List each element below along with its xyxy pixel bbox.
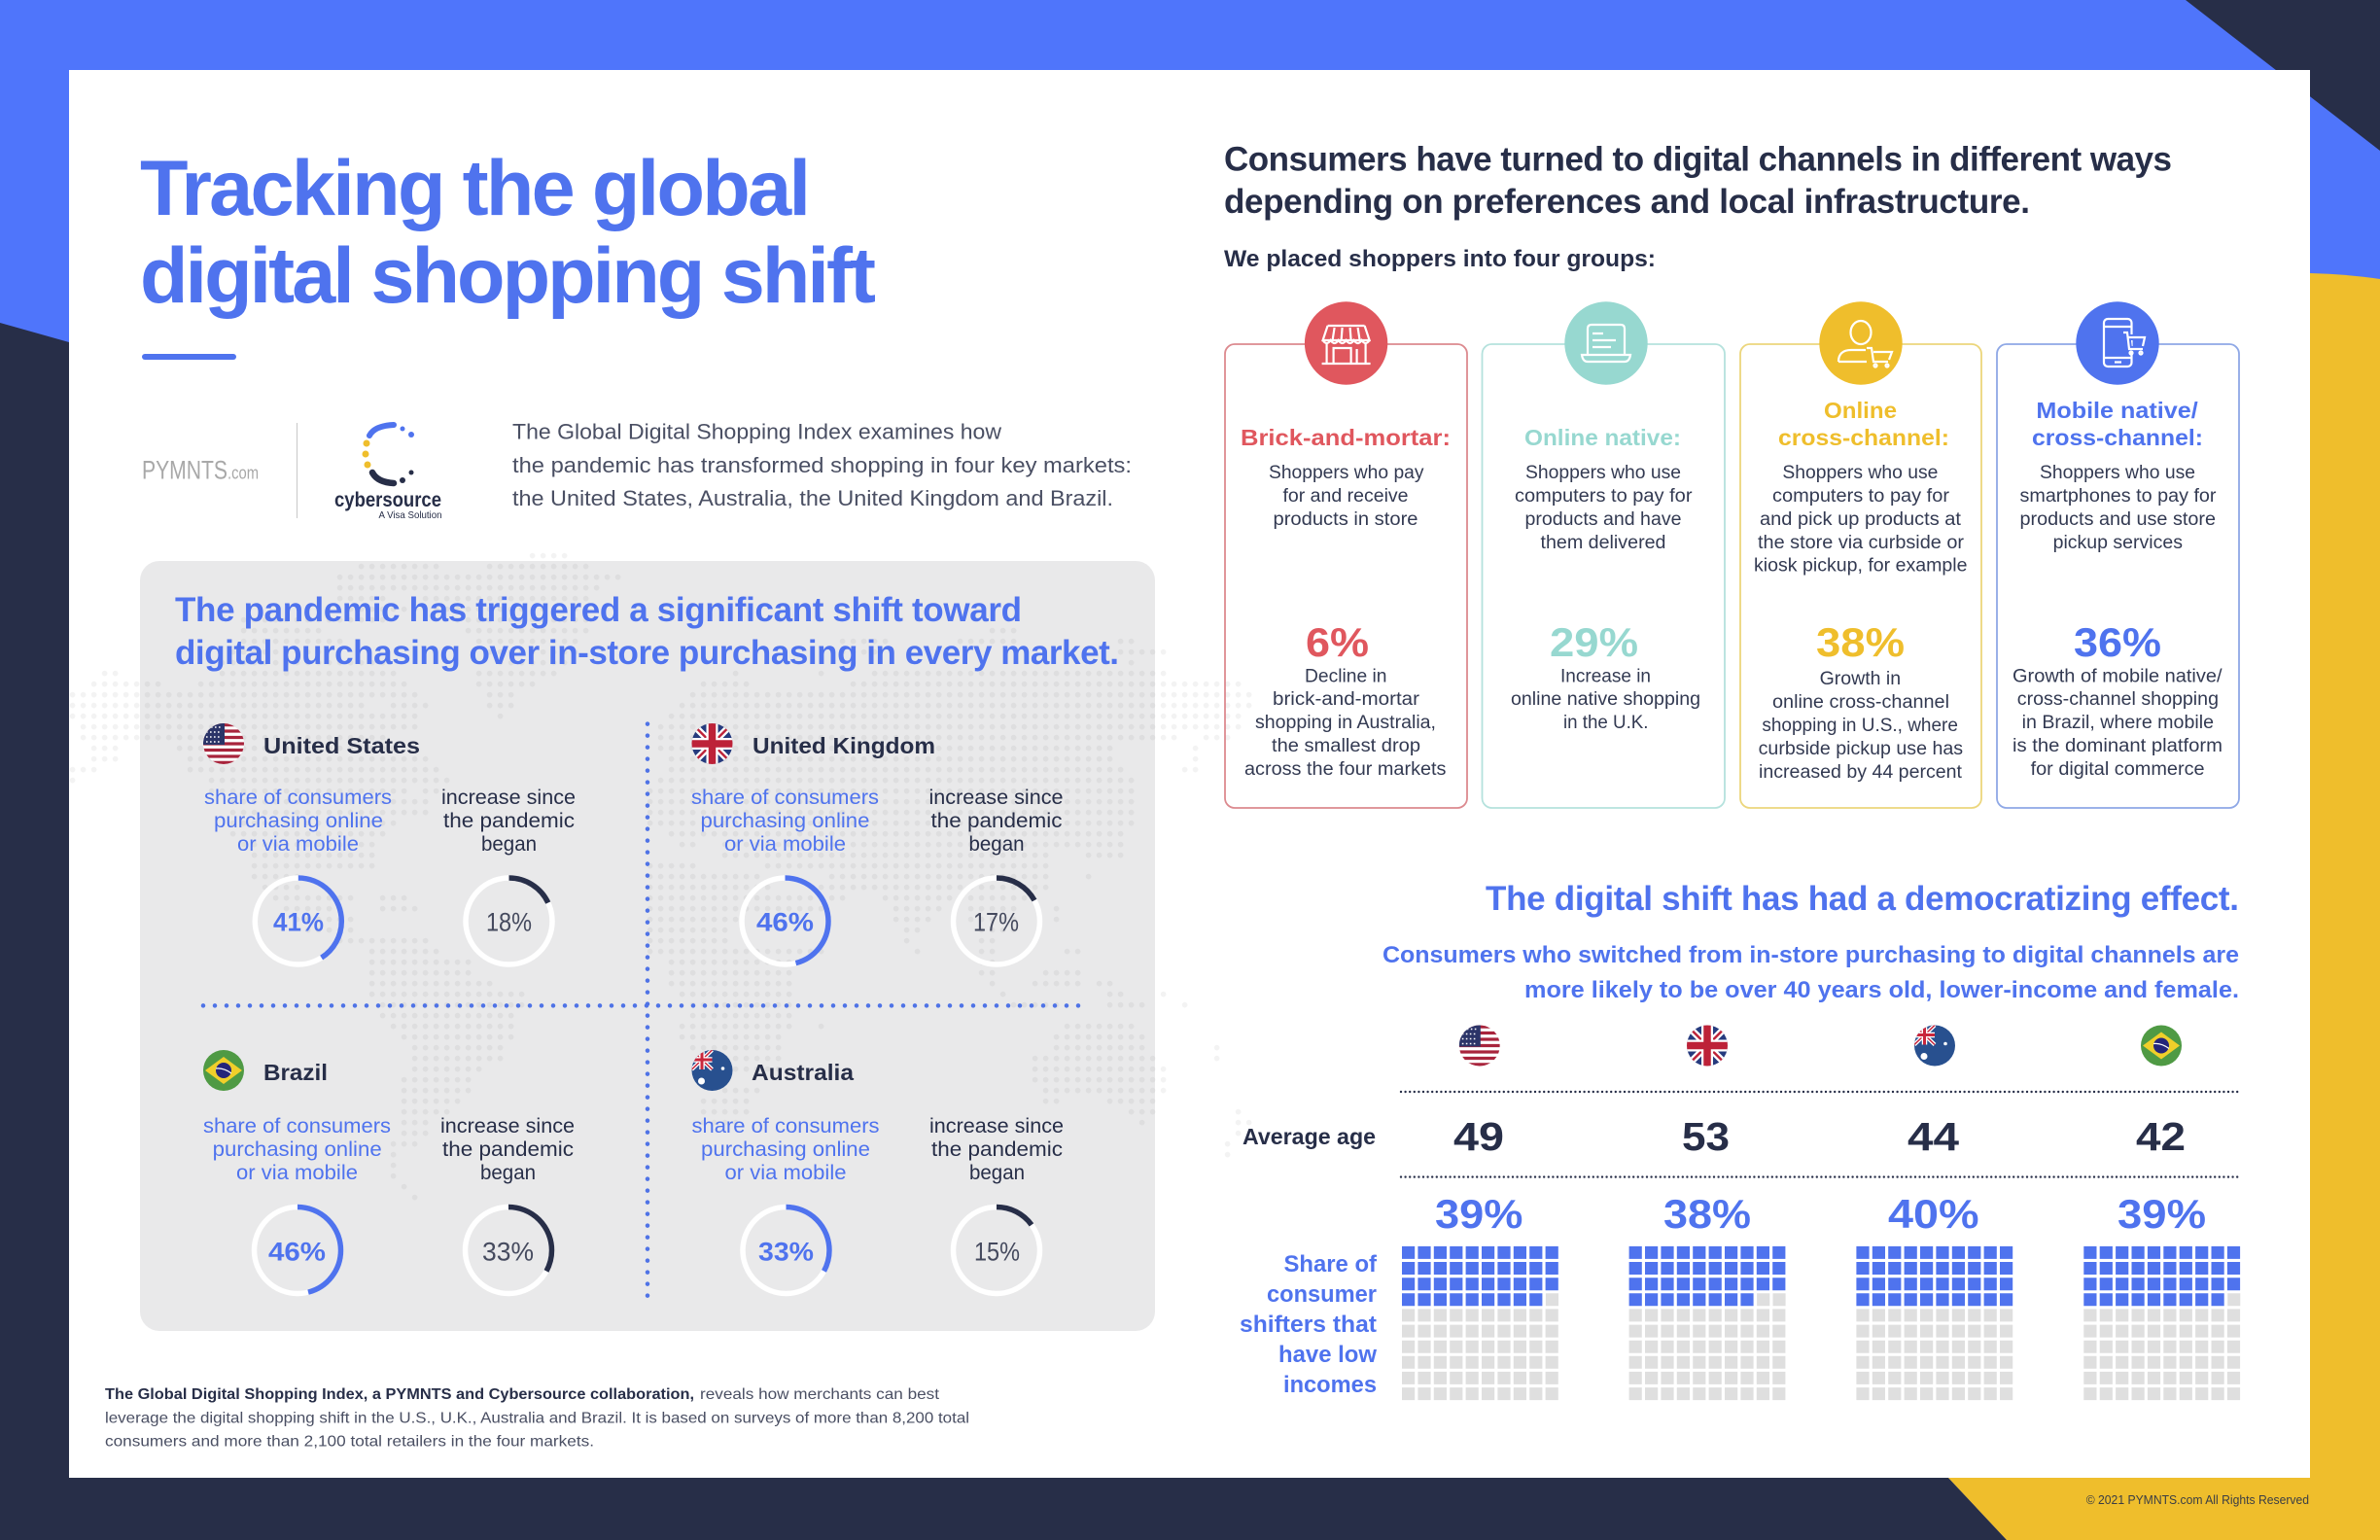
card stat: 38% (1816, 619, 1905, 665)
label: increase: began (968, 833, 1025, 856)
donut: 33% (465, 1208, 552, 1293)
country name: Australia (752, 1060, 855, 1085)
panel heading: digital purchasing over in-store purchasing in every market. (175, 634, 1119, 672)
card description: Shoppers who use (1782, 463, 1938, 483)
label: share (204, 787, 392, 856)
waffle chart: Brazil 39%: 39% (2118, 1191, 2206, 1237)
card title (1778, 398, 1949, 450)
card stat description: the smallest drop (1272, 736, 1420, 756)
intro text: The Global Digital Shopping Index examines how (512, 420, 1001, 443)
card description: kiosk pickup, for example (1754, 556, 1968, 576)
panel heading: The pandemic has triggered a significant shift toward (175, 591, 1022, 629)
card description: pickup services (2053, 533, 2183, 553)
card title (2032, 398, 2203, 450)
donut: 46%: 46% (268, 1237, 326, 1266)
icon: Australia flag (692, 1050, 733, 1091)
row label: low incomes: shifters that (1240, 1312, 1377, 1338)
card description (1754, 463, 1968, 576)
row: average age: 49 (1453, 1114, 1504, 1159)
label: increase (929, 787, 1064, 856)
label: increase: the pandemic (442, 1138, 574, 1161)
label: increase: increase since (929, 1115, 1064, 1138)
donut: 17% (953, 878, 1040, 964)
copyright: © 2021 PYMNTS.com All Rights Reserved (2086, 1493, 2309, 1507)
card description: Shoppers who use (1525, 463, 1681, 483)
card: mobile native (1997, 301, 2239, 808)
waffle chart: UK 38%: 38% (1663, 1191, 1751, 1237)
donut: 33%: 33% (758, 1237, 814, 1266)
label: share: share of consumers (204, 787, 392, 809)
icon: laptop (1564, 301, 1648, 385)
title (140, 145, 876, 320)
card description: for and receive (1283, 486, 1408, 507)
card description: Shoppers who use (2040, 463, 2195, 483)
label: share (692, 1115, 879, 1184)
card stat description: Growth of mobile native/ (2012, 666, 2222, 686)
card description (2020, 463, 2217, 553)
card title: Online native: (1524, 425, 1681, 450)
label: increase: began (481, 833, 537, 856)
label: increase: the pandemic (931, 1138, 1063, 1161)
card description: the store via curbside or (1758, 533, 1965, 553)
right heading (1224, 141, 2172, 221)
card description: computers to pay for (1515, 486, 1693, 507)
footnote (105, 1386, 969, 1451)
footnote: The Global Digital Shopping Index, a PYMNTS and Cybersource collaboration, (105, 1386, 694, 1403)
card stat description (1759, 669, 1963, 783)
card description (1515, 463, 1693, 553)
card title: cross-channel: (2032, 425, 2203, 450)
label: increase: the pandemic (443, 810, 575, 832)
table flags (1459, 1025, 2182, 1066)
label: increase: began (480, 1162, 536, 1184)
icon: Brazil flag (203, 1050, 244, 1091)
label: share: purchasing online (214, 810, 383, 832)
icon: shopper with cart (1819, 301, 1903, 385)
label: increase (440, 1115, 575, 1184)
label: share: purchasing online (701, 1138, 870, 1161)
card description: products and use store (2020, 509, 2216, 530)
label: increase: increase since (929, 787, 1064, 809)
subheading: over 40, lower-income, female: Consumers who switched from in-store purchasing to digital channels are (1382, 942, 2239, 968)
icon: US flag (203, 723, 244, 764)
label: share: purchasing online (213, 1138, 382, 1161)
card title: Mobile native/ (2036, 398, 2198, 423)
waffle chart: Brazil 39% (2083, 1191, 2240, 1394)
label: increase: increase since (440, 1115, 575, 1138)
card stat: 6% (1306, 619, 1369, 665)
card: online cross-channel (1740, 301, 1981, 808)
logo: cybersource: cybersource (334, 489, 441, 511)
row label: low incomes (1240, 1251, 1378, 1398)
label: share: share of consumers (691, 787, 879, 809)
market: United Kingdom (691, 723, 1064, 964)
world map dots (73, 556, 1260, 1208)
logo: PYMNTS: .com (228, 463, 259, 482)
right heading: depending on preferences and local infrastructure. (1224, 183, 2030, 221)
label: share: purchasing online (700, 810, 869, 832)
row: average age (1242, 1114, 2186, 1159)
icon: UK flag (692, 723, 733, 764)
label: increase (441, 787, 576, 856)
label: share: or via mobile (236, 1162, 358, 1184)
label: increase (929, 1115, 1064, 1184)
row: average age: Average age (1242, 1124, 1376, 1149)
card stat description (2012, 666, 2222, 780)
intro text: the United States, Australia, the United Kingdom and Brazil. (512, 486, 1113, 510)
subheading: four groups: We placed shoppers into four groups: (1224, 246, 1656, 272)
heading: democratizing effect: The digital shift has had a democratizing effect. (1486, 880, 2239, 918)
card stat: 36% (2074, 619, 2161, 665)
card stat description: cross-channel shopping (2017, 689, 2219, 710)
label: share: share of consumers (692, 1115, 879, 1138)
logo divider (297, 423, 298, 518)
footnote: reveals how merchants can best (700, 1386, 940, 1403)
card stat description: in the U.K. (1563, 713, 1649, 733)
donut: 15%: 15% (974, 1237, 1020, 1266)
card stat description (1511, 666, 1700, 733)
footnote: consumers and more than 2,100 total retailers in the four markets. (105, 1433, 594, 1451)
divider: vertical dotted (646, 724, 649, 1297)
card stat description: increased by 44 percent (1759, 762, 1963, 783)
label: share: share of consumers (203, 1115, 391, 1138)
label: increase: began (969, 1162, 1025, 1184)
card stat description: is the dominant platform (2012, 736, 2222, 756)
card title: cross-channel: (1778, 425, 1949, 450)
subheading: over 40, lower-income, female: more likely to be over 40 years old, lower-income and female. (1524, 977, 2239, 1003)
right heading: Consumers have turned to digital channels in different ways (1224, 141, 2172, 179)
donut: 41% (255, 878, 341, 964)
footnote: leverage the digital shopping shift in the U.S., U.K., Australia and Brazil. It is based on surveys of more than 8,200 total (105, 1410, 969, 1427)
row label: low incomes: consumer (1267, 1281, 1377, 1308)
card title: Brick-and-mortar: (1241, 425, 1451, 450)
card description: smartphones to pay for (2020, 486, 2217, 507)
label: share: or via mobile (725, 1162, 846, 1184)
waffle chart: Australia 40% (1856, 1191, 2012, 1394)
card: brick-and-mortar (1225, 301, 1467, 808)
card stat description: Decline in (1305, 666, 1386, 686)
label: share (691, 787, 879, 856)
market: Australia (692, 1050, 1064, 1293)
panel: pandemic shift by market (140, 561, 1155, 1331)
card stat description: across the four markets (1244, 759, 1447, 780)
donut: 33%: 33% (482, 1237, 534, 1266)
country name: United States (263, 733, 420, 758)
card stat description: online native shopping (1511, 689, 1700, 710)
waffle chart: Australia 40%: 40% (1888, 1191, 1979, 1237)
donut: 46% (255, 1208, 340, 1293)
waffle chart: US 39% (1402, 1191, 1558, 1394)
card stat description: shopping in U.S., where (1762, 716, 1958, 736)
donut: 46%: 46% (756, 908, 814, 937)
label: share (203, 1115, 391, 1184)
intro text (512, 420, 1132, 510)
icon: store (1305, 301, 1387, 385)
logo: PYMNTS: PYMNTS (142, 455, 228, 484)
title: digital shopping shift (140, 232, 876, 320)
card: online native (1482, 301, 1725, 808)
row label: low incomes: have low (1278, 1342, 1377, 1368)
country name: Brazil (263, 1060, 328, 1085)
card description: them delivered (1540, 533, 1666, 553)
row label: low incomes: Share of (1283, 1251, 1378, 1278)
card title: Online (1824, 398, 1897, 423)
logo: cybersource: A Visa Solution (379, 509, 442, 521)
donut: 17%: 17% (973, 908, 1019, 937)
card stat description: brick-and-mortar (1273, 689, 1420, 710)
card description: products in store (1274, 509, 1418, 530)
card stat description (1244, 666, 1447, 780)
row label: low incomes: incomes (1283, 1372, 1377, 1398)
waffle chart: US 39%: 39% (1435, 1191, 1522, 1237)
card stat description: curbside pickup use has (1759, 739, 1963, 759)
background: dark lower-left shape (0, 323, 2007, 1540)
card stat description: in Brazil, where mobile (2022, 713, 2214, 733)
market: United States (203, 723, 576, 964)
label: share: or via mobile (237, 833, 359, 856)
title: Tracking the global (140, 145, 811, 232)
row: average age: 42 (2136, 1114, 2186, 1159)
divider: horizontal dotted (203, 1003, 1082, 1008)
card stat description: shopping in Australia, (1255, 713, 1436, 733)
card description (1269, 463, 1424, 530)
panel heading (175, 591, 1119, 672)
country name: United Kingdom (752, 733, 935, 758)
card description: products and have (1524, 509, 1682, 530)
row: average age: 53 (1682, 1114, 1730, 1159)
card description: Shoppers who pay (1269, 463, 1424, 483)
icon: phone with cart (2076, 301, 2159, 385)
market: Brazil (203, 1050, 575, 1293)
donut: 18% (466, 878, 552, 964)
background: dark top-right triangle (2186, 0, 2380, 151)
label: increase: the pandemic (931, 810, 1062, 832)
row: average age: 44 (1908, 1114, 1959, 1159)
intro text: the pandemic has transformed shopping in four key markets: (512, 453, 1132, 477)
donut: 41%: 41% (273, 908, 324, 937)
card description: and pick up products at (1760, 509, 1962, 530)
donut: 46% (742, 878, 828, 964)
background: yellow lower-right shape (1944, 273, 2380, 1540)
card description: computers to pay for (1772, 486, 1950, 507)
card stat description: Growth in (1820, 669, 1901, 689)
card stat: 29% (1550, 619, 1638, 665)
card stat description: for digital commerce (2031, 759, 2205, 780)
waffle chart: UK 38% (1629, 1191, 1786, 1394)
donut: 15% (953, 1208, 1040, 1293)
donut: 18%: 18% (486, 908, 532, 937)
card stat description: online cross-channel (1772, 692, 1949, 713)
donut: 33% (743, 1208, 829, 1293)
label: increase: increase since (441, 787, 576, 809)
card stat description: Increase in (1560, 666, 1651, 686)
logo: cybersource (334, 425, 442, 521)
label: share: or via mobile (724, 833, 846, 856)
subheading: over 40, lower-income, female (1382, 942, 2239, 1003)
title rule (142, 354, 236, 360)
